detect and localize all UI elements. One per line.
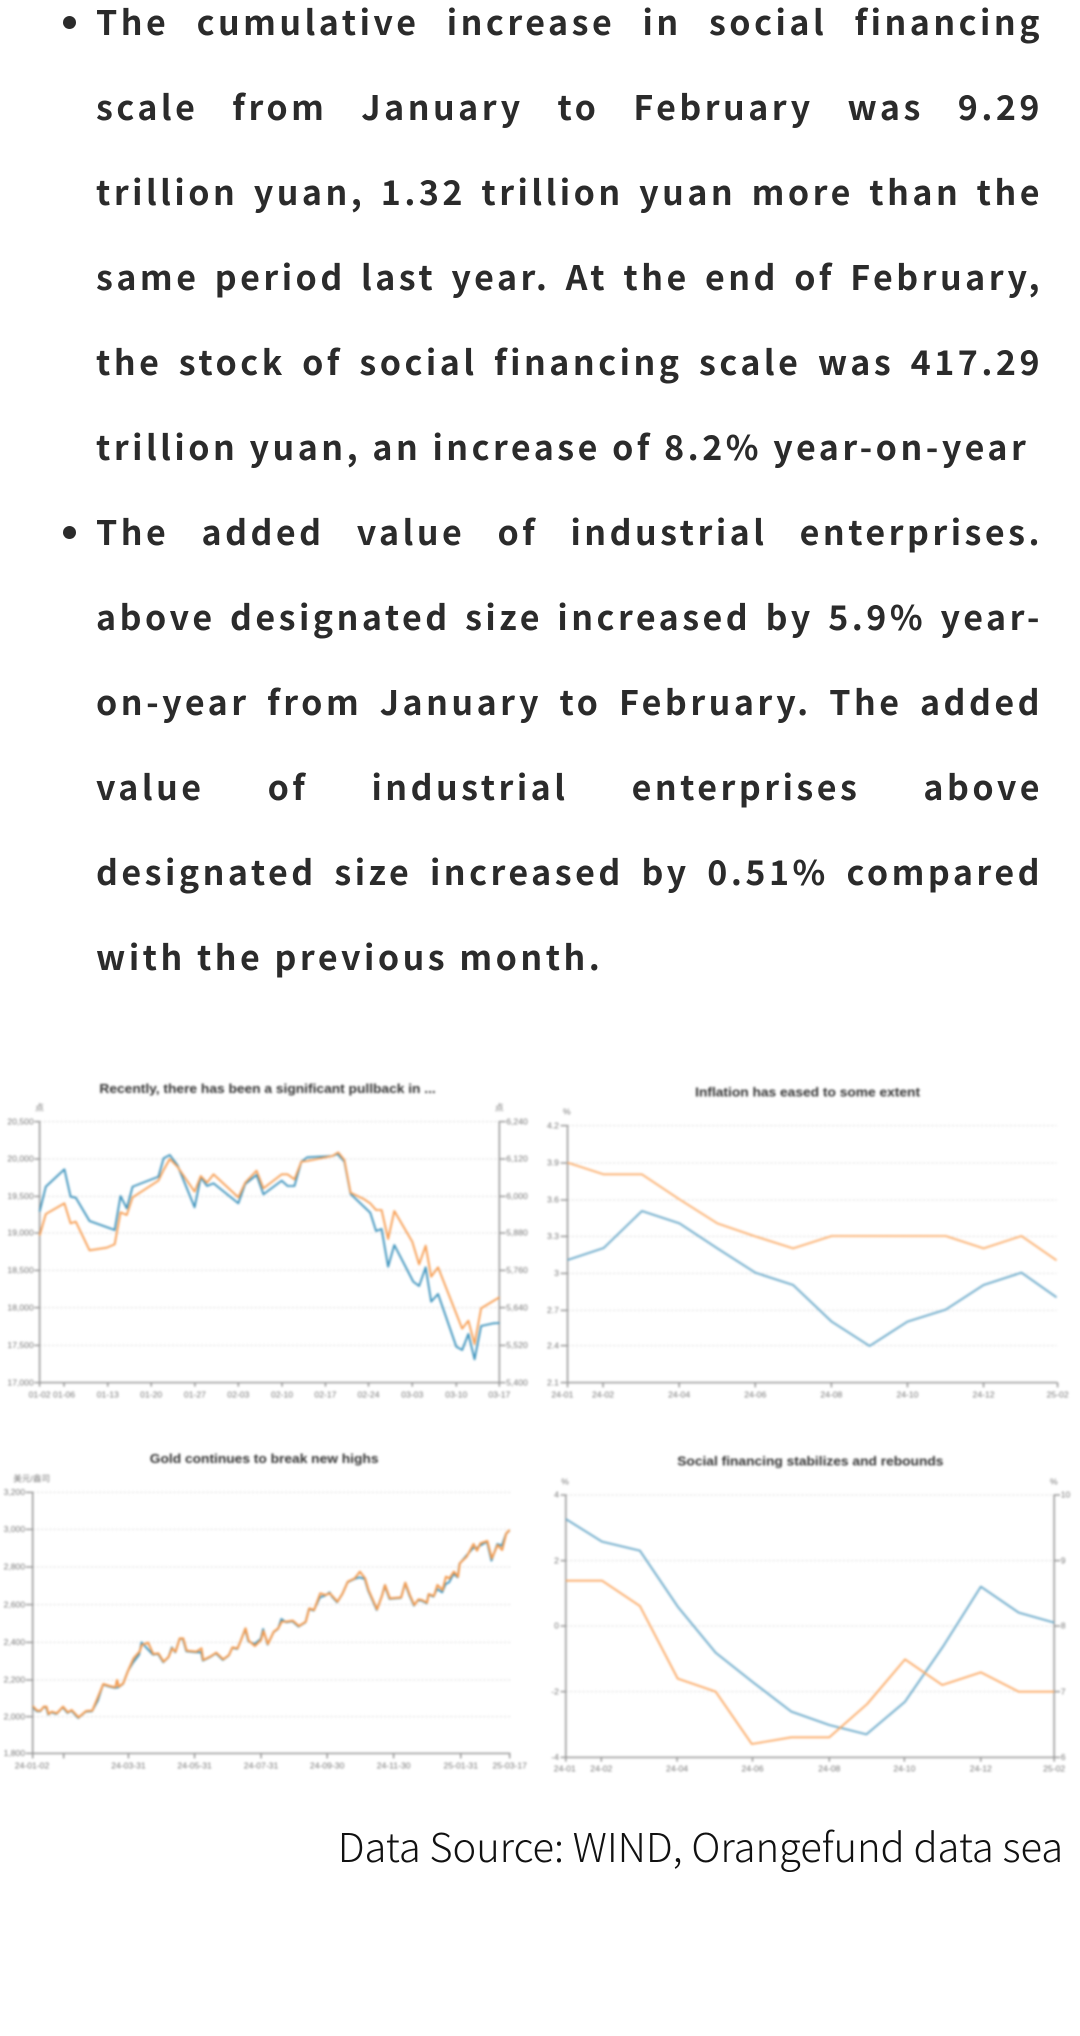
- line: blue series: [566, 1519, 1054, 1734]
- axis labels: -4: [551, 1752, 559, 1762]
- axis labels: 02-03: [227, 1389, 250, 1399]
- text block: industrial enterprises: with the previous month.: [96, 931, 603, 980]
- axis labels: 3.6: [547, 1195, 559, 1205]
- axis labels: 点: [35, 1103, 44, 1113]
- text block: industrial enterprises: value of industrial enterprises above: [96, 761, 1043, 810]
- axis labels: 3,200: [4, 1487, 25, 1497]
- text block: industrial enterprises: The added value of industrial enterprises.: [96, 506, 1043, 555]
- axis labels: 25-03-17: [492, 1760, 527, 1770]
- axis labels: 5,760: [506, 1265, 528, 1275]
- text block: social financing: [96, 0, 1043, 470]
- text block: industrial enterprises: on-year from January to February. The added: [96, 676, 1043, 725]
- text block: social financing: the stock of social financing scale was 417.29: [96, 336, 1043, 385]
- axis labels: 24-03-31: [111, 1760, 146, 1770]
- line: orange series: [566, 1581, 1054, 1744]
- axis labels: 2.7: [547, 1305, 559, 1315]
- axis labels: 24-06: [744, 1389, 767, 1399]
- axis labels: 3,000: [4, 1524, 25, 1534]
- axis labels: 20,500: [7, 1116, 34, 1126]
- data source note: Data Source: WIND, Orangefund data sea: [338, 1816, 1063, 1874]
- axis labels: 19,500: [7, 1191, 34, 1201]
- axis labels: 24-02: [592, 1389, 614, 1399]
- text block: industrial enterprises: above designated size increased by 5.9% year-: [96, 591, 1043, 640]
- axis labels: 24-10: [893, 1764, 916, 1774]
- axis labels: 9: [1061, 1555, 1066, 1565]
- text block: industrial enterprises: [96, 506, 1043, 980]
- axis labels: [4, 1474, 527, 1770]
- axis labels: 7: [1061, 1686, 1066, 1696]
- axis labels: 6,240: [506, 1116, 528, 1126]
- axis labels: 20,000: [7, 1154, 34, 1164]
- axis labels: 25-02: [1043, 1764, 1065, 1774]
- axis labels: 1,800: [4, 1748, 25, 1758]
- axis labels: 24-11-30: [377, 1760, 411, 1770]
- axis labels: 01-13: [97, 1389, 119, 1399]
- axis labels: 2.4: [547, 1340, 559, 1350]
- axis labels: 02-10: [271, 1389, 293, 1399]
- axis labels: 03-10: [445, 1389, 468, 1399]
- axis labels: 24-01: [551, 1389, 574, 1399]
- chart: inflation: [546, 1085, 1070, 1399]
- axis labels: 24-08: [818, 1764, 841, 1774]
- text block: industrial enterprises: designated size increased by 0.51% compared: [96, 846, 1043, 895]
- line: orange series: [568, 1163, 1057, 1260]
- axis labels: 10: [1061, 1490, 1071, 1500]
- axis labels: 02-24: [357, 1389, 380, 1399]
- axis labels: 01-20: [140, 1389, 162, 1399]
- axis labels: 18,000: [7, 1302, 34, 1312]
- axis labels: 24-02: [590, 1764, 613, 1774]
- axis labels: -2: [551, 1686, 559, 1696]
- axis labels: 6,000: [506, 1191, 528, 1201]
- chart: social financing: [551, 1454, 1072, 1774]
- axis labels: 3.9: [547, 1158, 559, 1168]
- axis labels: 24-08: [820, 1389, 843, 1399]
- chart: gold: [3, 1451, 528, 1770]
- axis labels: [551, 1476, 1071, 1774]
- axis labels: 24-04: [668, 1389, 690, 1399]
- axis labels: 3.3: [547, 1231, 559, 1241]
- axis labels: 01-02: [29, 1389, 51, 1399]
- axis labels: 4: [554, 1490, 559, 1500]
- axis labels: 6,120: [506, 1154, 528, 1164]
- axis labels: 03-03: [401, 1389, 424, 1399]
- axis labels: 2.1: [547, 1377, 559, 1387]
- axis labels: 4.2: [547, 1120, 559, 1130]
- axis labels: 2,200: [4, 1675, 25, 1685]
- axis labels: 01-27: [184, 1389, 206, 1399]
- axis labels: 17,500: [7, 1340, 34, 1350]
- axis labels: 2,400: [4, 1637, 25, 1647]
- text block: social financing: same period last year. At the end of February,: [96, 251, 1043, 300]
- text block: social financing: scale from January to February was 9.29: [96, 81, 1043, 130]
- axis labels: 5,640: [506, 1302, 528, 1312]
- axis labels: 2,800: [4, 1562, 25, 1572]
- axis labels: 5,400: [506, 1377, 528, 1387]
- chart title: Recently, there has been a significant pullback in ...: [99, 1081, 436, 1096]
- axis labels: 24-01-02: [15, 1760, 50, 1770]
- axis labels: [547, 1106, 1069, 1399]
- axis labels: 19,000: [7, 1228, 34, 1238]
- chart title: Social financing stabilizes and rebounds: [677, 1454, 943, 1469]
- text block: social financing: trillion yuan, an increase of 8.2% year-on-year: [96, 421, 1029, 470]
- chart title: Inflation has eased to some extent: [695, 1085, 921, 1100]
- axis labels: 3: [554, 1268, 559, 1278]
- axis labels: 2,000: [4, 1711, 25, 1721]
- text block: social financing: trillion yuan, 1.32 trillion yuan more than the: [96, 166, 1043, 215]
- axis labels: 美元/盎司: [13, 1474, 50, 1484]
- bullet marker 2: [63, 526, 76, 539]
- line: blue index: [40, 1154, 499, 1359]
- axis labels: 17,000: [7, 1377, 34, 1387]
- chart: A-share pullback: [6, 1081, 529, 1399]
- axis labels: 2,600: [4, 1599, 25, 1609]
- line: blue series: [568, 1211, 1057, 1346]
- line: orange gold price: [33, 1530, 510, 1717]
- axis labels: 25-02: [1047, 1389, 1069, 1399]
- axis labels: 24-06: [741, 1764, 764, 1774]
- axis labels: 24-04: [666, 1764, 688, 1774]
- axis labels: 0: [554, 1621, 559, 1631]
- axis labels: [7, 1103, 528, 1399]
- axis labels: 25-01-31: [444, 1760, 478, 1770]
- axis labels: 24-10: [896, 1389, 919, 1399]
- bullet marker 1: [63, 16, 76, 29]
- axis labels: 点: [495, 1103, 504, 1113]
- axis labels: 5,520: [506, 1340, 528, 1350]
- axis labels: 8: [1061, 1621, 1066, 1631]
- axis labels: 24-12: [970, 1764, 992, 1774]
- axis labels: 24-05-31: [177, 1760, 212, 1770]
- axis labels: 24-12: [973, 1389, 995, 1399]
- axis labels: 5,880: [506, 1228, 528, 1238]
- axis labels: %: [561, 1476, 569, 1486]
- chart title: Gold continues to break new highs: [150, 1451, 378, 1466]
- axis labels: 24-09-30: [310, 1760, 345, 1770]
- line: blue gold price: [32, 1531, 509, 1718]
- axis labels: %: [1050, 1476, 1058, 1486]
- line: orange index: [40, 1152, 499, 1344]
- axis labels: 01-06: [53, 1389, 75, 1399]
- axis labels: 18,500: [7, 1265, 34, 1275]
- axis labels: %: [563, 1106, 571, 1116]
- axis labels: 03-17: [488, 1389, 511, 1399]
- axis labels: 24-01: [554, 1764, 576, 1774]
- axis labels: 02-17: [314, 1389, 337, 1399]
- axis labels: 2: [554, 1555, 559, 1565]
- axis labels: 24-07-31: [244, 1760, 279, 1770]
- axis labels: 6: [1061, 1752, 1066, 1762]
